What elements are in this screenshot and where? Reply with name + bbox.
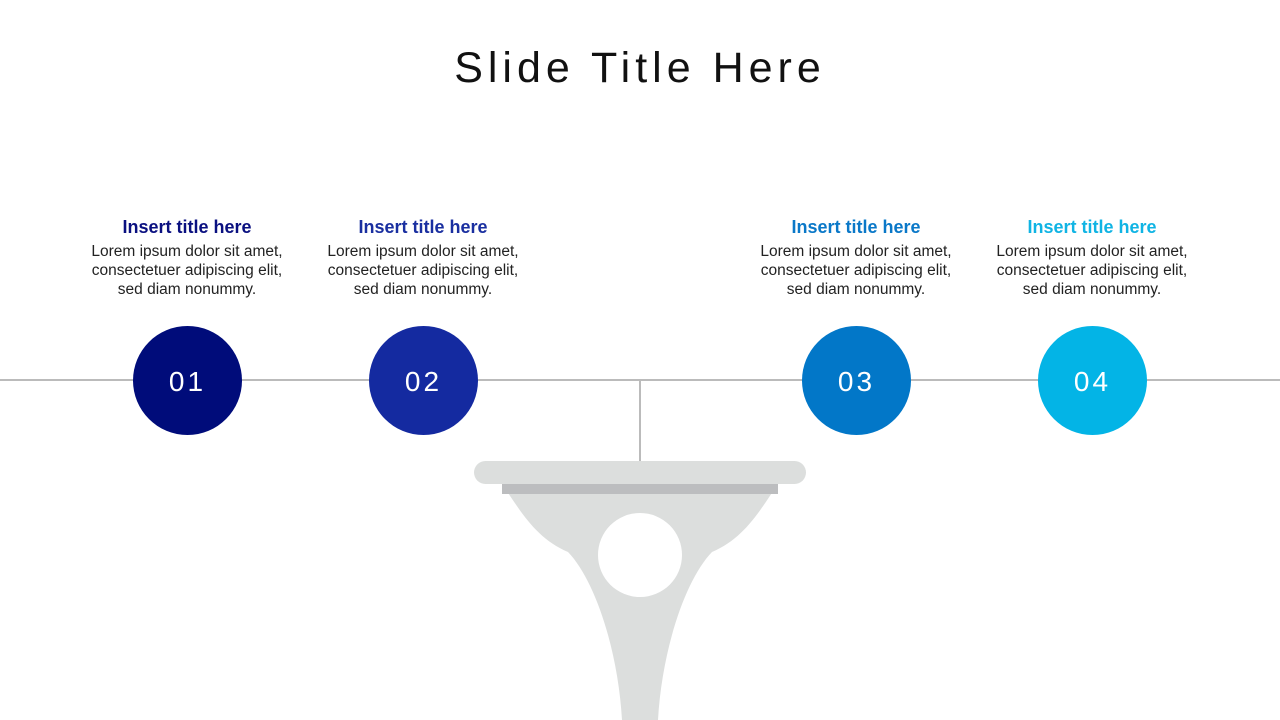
funnel [474,461,806,720]
circle 03 [802,326,911,435]
item 2 text [327,217,519,298]
item 4 text: Insert title here [1027,217,1157,237]
circle 04: 04 [1074,366,1111,397]
circle 01 [133,326,242,435]
item 3 text: sed diam nonummy. [787,281,925,298]
circle 02: 02 [405,366,442,397]
item 3 text: consectetuer adipiscing elit, [761,262,951,279]
item 4 text: Lorem ipsum dolor sit amet, [996,243,1188,260]
item 2 text: Lorem ipsum dolor sit amet, [327,243,519,260]
circle 03: 03 [838,366,875,397]
item 4 text [996,217,1188,298]
item 3 text: Insert title here [791,217,921,237]
item 1 text [91,217,283,298]
item 2 text: sed diam nonummy. [354,281,492,298]
item 1 text: sed diam nonummy. [118,281,256,298]
item 1 text: Lorem ipsum dolor sit amet, [91,243,283,260]
item 2 text: Insert title here [358,217,488,237]
circle 01: 01 [169,366,206,397]
item 3 text: Lorem ipsum dolor sit amet, [760,243,952,260]
item 4 text: consectetuer adipiscing elit, [997,262,1187,279]
item 2 text: consectetuer adipiscing elit, [328,262,518,279]
item 4 text: sed diam nonummy. [1023,281,1161,298]
item 3 text [760,217,952,298]
title: Slide Title Here [454,44,826,92]
item 1 text: Insert title here [122,217,252,237]
circle 04 [1038,326,1147,435]
circle 02 [369,326,478,435]
item 1 text: consectetuer adipiscing elit, [92,262,282,279]
